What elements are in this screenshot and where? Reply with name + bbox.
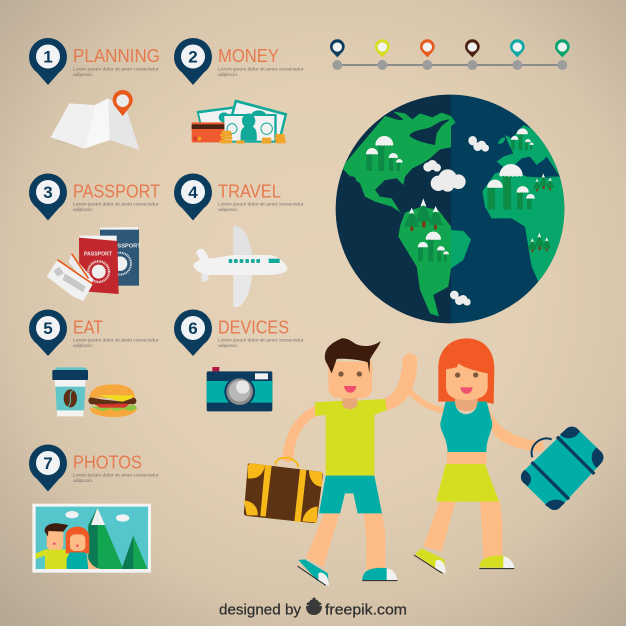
pin 4 and heading: travel: adipiscin. <box>218 207 238 213</box>
globe <box>335 93 568 327</box>
pin: green <box>555 39 570 57</box>
pin 7 and heading: photos: 7 <box>43 454 53 473</box>
icon: passports and tickets: PASSPORT <box>84 252 113 258</box>
pin 6 and heading: devices: 6 <box>188 319 198 338</box>
africa <box>482 169 568 282</box>
illustration: couple high-fiving with suitcases <box>244 338 603 586</box>
pin 4 and heading: travel: Lorem ipsum dolor sit amet consectetur <box>218 202 304 208</box>
icon: framed photo of couple and mountains <box>32 504 151 573</box>
pin 5 and heading: eat: EAT <box>73 316 103 338</box>
pin 6 and heading: devices: DEVICES <box>218 316 289 338</box>
north america <box>342 112 456 215</box>
pin 3 and heading: passport: PASSPORT <box>73 180 160 202</box>
pin 2 and heading: money: adipiscin. <box>218 72 238 78</box>
pin 2 and heading: money: 2 <box>188 48 198 66</box>
pin 1 and heading: planning <box>29 38 160 85</box>
pin 5 and heading: eat: adipiscin. <box>73 343 93 349</box>
pin 5 and heading: eat: Lorem ipsum dolor sit amet consectetur <box>73 338 159 344</box>
icon: freepik logo <box>306 598 322 615</box>
pin: teal <box>510 39 525 57</box>
icon: folded map with location marker <box>51 90 139 150</box>
south america <box>398 207 451 317</box>
pin: navy <box>330 39 345 57</box>
icon: banknotes, card and coins <box>192 99 287 144</box>
pin: lime <box>375 39 390 57</box>
location timeline <box>330 39 570 70</box>
pin 7 and heading: photos <box>29 445 159 492</box>
pin 1 and heading: planning: Lorem ipsum dolor sit amet consectetur <box>73 66 159 72</box>
icon: coffee cup and burger <box>52 367 137 417</box>
pin 7 and heading: photos: PHOTOS <box>73 452 142 472</box>
pin 7 and heading: photos: Lorem ipsum dolor sit amet consectetur <box>73 472 159 478</box>
pin 2 and heading: money: Lorem ipsum dolor sit amet consectetur <box>218 66 304 72</box>
footer: designed by freepik.com: freepik.com <box>325 602 407 618</box>
icon: passports and tickets <box>47 227 141 301</box>
pin 7 and heading: photos: adipiscin. <box>73 478 93 484</box>
icon: passports and tickets: PASSPORT <box>110 243 141 249</box>
pin 1 and heading: planning: PLANNING <box>73 45 160 66</box>
clouds <box>423 136 489 306</box>
pin 2 and heading: money: MONEY <box>218 45 279 66</box>
teal suitcase <box>521 427 603 510</box>
pin 6 and heading: devices: Lorem ipsum dolor sit amet consectetur <box>218 338 304 344</box>
pin 3 and heading: passport: adipiscin. <box>73 207 93 213</box>
footer: designed by freepik.com <box>219 598 407 618</box>
pin 4 and heading: travel: 4 <box>188 183 198 202</box>
mountain and tree clusters <box>366 136 403 171</box>
pin 3 and heading: passport <box>29 174 160 220</box>
pin 6 and heading: devices: adipiscin. <box>218 343 238 349</box>
pin: orange <box>420 39 435 57</box>
man <box>282 338 417 586</box>
pin 4 and heading: travel <box>174 174 304 220</box>
pin: brown <box>465 39 480 57</box>
woman <box>408 338 543 573</box>
pin 1 and heading: planning: 1 <box>43 48 53 66</box>
pin 3 and heading: passport: 3 <box>43 183 53 202</box>
brown suitcase <box>244 458 323 523</box>
europe and asia <box>497 125 565 180</box>
pin 3 and heading: passport: Lorem ipsum dolor sit amet consectetur <box>73 202 159 208</box>
pin 6 and heading: devices <box>174 310 304 356</box>
pin 5 and heading: eat <box>29 310 159 356</box>
pin 5 and heading: eat: 5 <box>43 319 53 338</box>
pin 2 and heading: money <box>174 38 304 85</box>
pin 4 and heading: travel: TRAVEL <box>218 180 281 202</box>
icon: airplane <box>193 226 287 307</box>
icon: camera <box>207 367 272 411</box>
pin 1 and heading: planning: adipiscin. <box>73 72 93 78</box>
footer: designed by freepik.com: designed by <box>219 602 302 618</box>
